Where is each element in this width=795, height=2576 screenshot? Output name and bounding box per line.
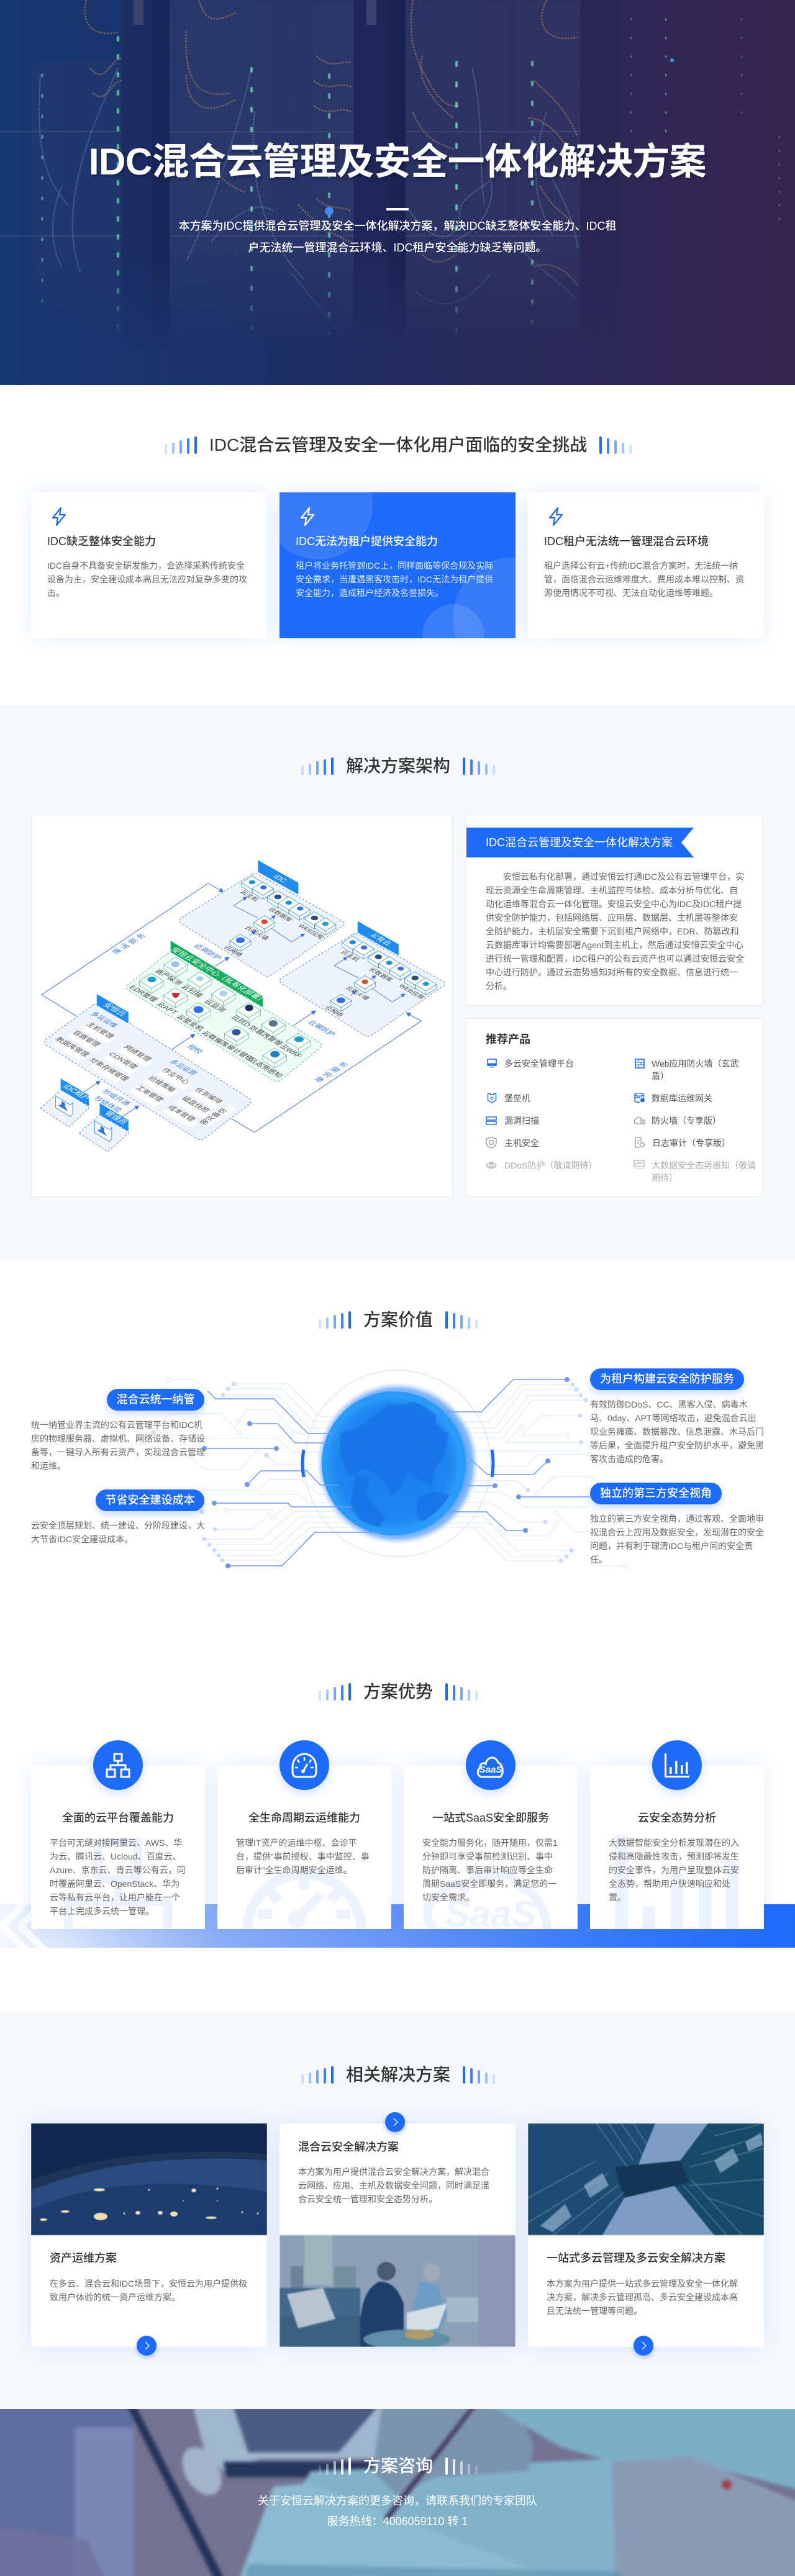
product: web application firewall	[635, 1059, 739, 1081]
value item 1 pill: 混合云统一纳管	[117, 1393, 195, 1406]
security center zone: 资产探测	[153, 968, 184, 987]
connector labels: 操运服务	[110, 931, 150, 955]
security center zone: 防篡改管理	[247, 1024, 285, 1047]
card text	[547, 2277, 738, 2318]
card heading: 全面的云平台覆盖能力	[62, 1812, 174, 1824]
Anheng cloud zone: 网络管理	[122, 1044, 153, 1062]
related card 1	[31, 2123, 267, 2347]
value item 3 pill	[590, 1368, 744, 1390]
card text: 源使用情况不可视、无法自动化运维等难题。	[544, 587, 718, 597]
card text: 台，提供“事前授权、事中监控、事	[236, 1851, 370, 1861]
card text	[47, 560, 247, 597]
challenge card 3	[528, 492, 764, 638]
card heading: 云安全态势分析	[638, 1812, 716, 1824]
ribbon heading	[466, 828, 694, 857]
icon: lightning bolt	[549, 507, 563, 526]
summary text: 云数据库审计均需要部署Agent到主机上，然后通过安恒云安全中心	[486, 940, 743, 950]
arrow button 1	[137, 2336, 157, 2356]
section heading: related solutions	[301, 2066, 494, 2084]
globe	[317, 1383, 478, 1544]
value item 2 text: 大节省IDC安全建设成本。	[31, 1534, 133, 1544]
summary text: 动化运维等混合云一体化管理。安恒云安全中心为IDC及IDC租户提	[486, 899, 742, 909]
card heading: IDC无法为租户提供安全能力	[296, 535, 438, 548]
product: firewall dedicated: 防火墙（专享版）	[652, 1116, 721, 1126]
card text: 周期SaaS安全即服务，满足您的一	[422, 1879, 556, 1889]
IDC zone	[179, 860, 344, 976]
icon: bar chart	[652, 1740, 702, 1790]
summary text: 中心进行防护。通过云态势感知对所有的安全数据、信息进行统一	[486, 967, 738, 977]
card text: 租户选择公有云+传统IDC混合方案时，无法统一纳	[544, 560, 738, 570]
image: earth at night	[31, 2123, 267, 2235]
public cloud zone: 云数据库	[366, 966, 395, 983]
card text	[544, 560, 744, 597]
hero description	[179, 220, 616, 253]
image: business meeting	[279, 2235, 516, 2347]
summary text: 进行统一管理和配置，IDC租户的公有云资产也可以通过安恒云安全	[486, 954, 744, 964]
card text: 大数据智能安全分析发现潜在的入	[609, 1838, 739, 1848]
summary text	[486, 872, 744, 991]
summary text: 全防护能力，主机层安全需要下沉到租户网络中，EDR、防篡改和	[486, 926, 739, 936]
advantage card 2	[217, 1765, 391, 1929]
card text: 平台上完成多云统一管理。	[50, 1906, 154, 1916]
Anheng cloud zone: 数据库管理	[53, 1036, 91, 1058]
card text: 致用户体验的统一资产运维方案。	[50, 2292, 180, 2302]
value item 4 pill: 独立的第三方安全视角	[600, 1487, 712, 1499]
icon: lightning bolt	[52, 507, 66, 526]
value item 4 text: 任。	[590, 1555, 607, 1565]
hero description: 户无法统一管理混合云环境、IDC租户安全能力缺乏等问题。	[248, 241, 547, 253]
IDC zone: IDC	[271, 874, 288, 884]
advantages gradient band	[0, 1904, 795, 1948]
IDC zone: 云主机	[238, 889, 261, 903]
thin light lines	[153, 1377, 627, 1568]
Anheng cloud zone: CDN管理	[107, 1051, 140, 1070]
card text: 切安全需求。	[422, 1892, 475, 1902]
card text: 置。	[609, 1892, 626, 1902]
image: skyscrapers	[528, 2123, 764, 2235]
security center zone: EDR管理	[127, 984, 160, 1003]
ribbon heading: IDC混合云管理及安全一体化解决方案	[486, 836, 673, 849]
security center zone: 云态势感知	[247, 1057, 285, 1079]
security center zone: 云WAF	[278, 1044, 303, 1059]
value item 3 text: 现业务瘫痪、数据篡改、信息泄露、木马后门	[590, 1427, 764, 1437]
card heading: IDC缺乏整体安全能力	[47, 535, 156, 548]
security center zone: 云抗D	[229, 1014, 253, 1028]
value item 4 text: 独立的第三方安全视角，通过客观、全面地审	[590, 1514, 764, 1524]
related card 2	[279, 2123, 516, 2347]
panel: recommended products	[466, 1018, 763, 1197]
advantage card 1	[31, 1765, 205, 1929]
public cloud zone: 云防火墙	[343, 985, 371, 1001]
card text: 后审计”全生命周期安全运维。	[236, 1865, 352, 1875]
value item 1 text: 备等，一键导入所有云资产，实现混合云管理	[31, 1447, 205, 1457]
card heading: 全生命周期云运维能力	[248, 1812, 360, 1824]
card text	[422, 1836, 558, 1904]
value item 2 text: 云安全顶层规划、统一建设、分阶段建设，大	[31, 1521, 205, 1530]
card text: 的安全事件，为用户呈现整体云安	[609, 1865, 739, 1875]
panel: isometric architecture diagram	[31, 815, 453, 1197]
security center zone: 云监测	[202, 998, 227, 1013]
card text: 时覆盖阿里云、OpenStack、华为	[50, 1879, 179, 1889]
card heading: IDC租户无法统一管理混合云环境	[544, 535, 709, 548]
products heading: 推荐产品	[486, 1033, 530, 1046]
product: host security	[486, 1137, 539, 1149]
section heading: consultation	[319, 2457, 476, 2475]
product: multi-cloud platform: 多云安全管理平台	[504, 1059, 574, 1069]
value item 3 text: 有效防御DDoS、CC、黑客入侵、病毒木	[590, 1399, 748, 1409]
card text: 为云、腾讯云、Ucloud、百度云、	[50, 1851, 181, 1861]
Anheng cloud zone: 安恒云	[101, 1001, 129, 1018]
connector labels: 秒级体验	[93, 1095, 124, 1114]
IDC zone: 云防火墙	[243, 924, 271, 941]
product: host security: 主机安全	[504, 1138, 539, 1148]
consultation text: 关于安恒云解决方案的更多咨询，请联系我们的专家团队	[258, 2495, 537, 2507]
product: DDoS protection: DDoS防护（敬请期待）	[504, 1160, 597, 1170]
section heading: architecture	[301, 756, 495, 775]
card text: 云网络、应用、主机及数据安全问题，同时满足混	[298, 2181, 489, 2190]
card text: 安全需求，当遭遇黑客攻击时，IDC无法为租户提供	[296, 574, 493, 584]
card text: 且无法统一管理等问题。	[547, 2306, 642, 2316]
light dots	[152, 1382, 588, 1563]
public cloud zone: 云主机	[338, 949, 361, 962]
Anheng cloud zone: 多云运维	[88, 1010, 120, 1029]
panel: related solutions section background	[0, 2012, 795, 2409]
Anheng cloud zone: 对象存储管理	[87, 1057, 131, 1082]
Anheng cloud zone: 工单管理	[134, 1084, 165, 1103]
hero title: IDC混合云管理及安全一体化解决方案	[89, 141, 706, 183]
decorative circles	[279, 492, 516, 638]
product: big data situational awareness	[634, 1160, 756, 1183]
card text: 决方案，解决多云管理孤岛、多云安全建设成本高	[547, 2292, 738, 2302]
circuit main lines	[204, 1380, 590, 1566]
Anheng cloud zone: 容器管理	[71, 1029, 102, 1048]
security center zone	[127, 941, 322, 1082]
summary text: 安恒云私有化部署，通过安恒云打通IDC及公有云管理平台，实	[503, 872, 744, 882]
security center zone: 云数据库审计管理	[199, 1029, 256, 1062]
card text	[236, 1838, 370, 1875]
architecture diagram	[40, 861, 445, 1152]
Anheng cloud zone: 任务编排	[193, 1087, 225, 1105]
card text: 侵和高隐蔽性攻击，预测即将发生	[609, 1851, 739, 1861]
IDC zone: 云数据库	[266, 906, 294, 923]
value item 2 pill: 节省安全建设成本	[106, 1494, 195, 1506]
card text: 安全能力，造成租户经济及名誉损失。	[296, 587, 443, 597]
value item 3 text: 客攻击造成的危害。	[590, 1454, 668, 1464]
administrator	[79, 1103, 130, 1152]
Anheng cloud zone: 容灾备份	[198, 1106, 229, 1126]
product: database gateway: 数据库运维网关	[652, 1093, 712, 1103]
card text: 全态势，帮助用户快速响应和处	[609, 1879, 730, 1889]
connector labels: 授权	[185, 1043, 205, 1055]
connector labels: 秒级开通	[101, 1088, 132, 1107]
challenge card 1	[31, 492, 267, 638]
public cloud zone: 公有云	[368, 931, 394, 947]
security center zone: 云堡垒机	[175, 1013, 207, 1033]
security center zone: 云扫描	[179, 983, 205, 998]
card heading: 一站式多云管理及多云安全解决方案	[547, 2252, 725, 2264]
connector labels: 操运服务	[313, 1059, 352, 1083]
card text: 安全能力服务化，随开随用，仅需1	[422, 1838, 558, 1848]
value item 1 text	[31, 1420, 205, 1471]
product: bastion host: 堡垒机	[504, 1093, 530, 1103]
card text: 防护隔离、事后审计响应等全生命	[422, 1865, 553, 1875]
value item 1 text: 房的物理服务器、虚拟机、网络设备、存储设	[31, 1434, 205, 1444]
product: vulnerability scan: 漏洞扫描	[504, 1116, 539, 1126]
card heading: 资产运维方案	[50, 2252, 117, 2264]
section heading: advantages: 方案优势	[363, 1682, 433, 1701]
icon: gauge	[279, 1740, 329, 1790]
value item 3 text: 马、0day、APT等网络攻击，避免混合云出	[590, 1413, 756, 1423]
card text: 云等私有云平台，让用户能在一个	[50, 1892, 180, 1902]
footer consultation banner	[0, 2409, 795, 2576]
product: big data situational awareness: 期待）	[652, 1173, 678, 1183]
chart: globe with circuit lines	[152, 1370, 628, 1568]
Anheng cloud zone: 运维策略	[146, 1075, 178, 1093]
product: web application firewall: 盾）	[652, 1071, 669, 1081]
outer ring	[304, 1370, 491, 1557]
Anheng cloud zone: 主机管理	[84, 1021, 116, 1039]
card text: 本方案为用户提供混合云安全解决方案，解决混合	[298, 2167, 489, 2177]
hotline: 服务热线：4006059110 转 1	[327, 2515, 468, 2528]
card text	[50, 2277, 247, 2304]
value item 4 text	[590, 1514, 764, 1565]
card text: 管，面临混合云运维难度大、费用成本难以控制、资	[544, 574, 744, 584]
card text: 设备为主，安全建设成本高且无法应对复杂多变的攻	[47, 574, 247, 584]
section heading: solution value: 方案价值	[363, 1310, 433, 1329]
administrator: 管理员	[102, 1109, 130, 1126]
circuit dots	[202, 1377, 570, 1568]
value item 2 text	[31, 1521, 205, 1544]
value item 1 text: 和运维。	[31, 1461, 66, 1471]
icon: SaaS cloud	[466, 1740, 516, 1790]
card text: 分钟即可享受事前检测识别、事中	[422, 1851, 553, 1861]
card text	[609, 1836, 739, 1904]
card text: 在多云、混合云和IDC场景下，安恒云为用户提供极	[50, 2279, 247, 2289]
card text: Azure、京东云、青云等公有云，同	[50, 1865, 186, 1875]
Anheng cloud zone: 作业中心	[160, 1067, 191, 1085]
watermark: gauge	[242, 1869, 366, 1929]
arrow button 3	[634, 2336, 653, 2356]
icon: SaaS cloud: SaaS	[479, 1765, 502, 1775]
hero divider	[386, 208, 409, 210]
value item 1 pill	[107, 1389, 204, 1411]
hero background: server racks and cables	[0, 0, 780, 337]
watermark: SaaS cloud	[404, 1765, 578, 1929]
summary text: 现云资源全生命周期管理、主机监控与体检、成本分析与优化、自	[486, 885, 738, 895]
card text	[298, 2165, 489, 2206]
card heading: 一站式SaaS安全即服务	[432, 1812, 549, 1824]
connector labels: 近源防护	[192, 942, 224, 961]
value item 4 text: 视混合云上应用及数据安全，发现潜在的安全	[590, 1527, 764, 1537]
product: big data situational awareness: 大数据安全态势感知（敬请	[652, 1160, 756, 1170]
value item 4 text: 问题，并有利于理清IDC与租户间的安全责	[590, 1541, 753, 1551]
footer background photo	[0, 2405, 795, 2576]
panel: solution summary	[466, 815, 763, 1006]
Anheng cloud zone: 成本管理	[166, 1104, 198, 1123]
card text	[50, 1838, 186, 1916]
section heading: solution value	[319, 1310, 478, 1329]
public cloud zone	[279, 921, 445, 1036]
product: bastion host	[487, 1093, 530, 1103]
connector labels: 云端防护	[306, 1019, 337, 1037]
watermark: org chart	[64, 1838, 172, 1929]
value item 4 pill	[590, 1483, 722, 1504]
IDC tenant: IDC租户	[61, 1083, 93, 1102]
card text: 管理IT资产的运维中枢、会诊平	[236, 1838, 357, 1848]
section heading: security challenges: IDC混合云管理及安全一体化用户面临的安全挑战	[209, 435, 587, 454]
arcs	[302, 1450, 304, 1477]
watermark: bar chart	[590, 1765, 764, 1929]
public cloud zone: WEB应用	[397, 983, 427, 1000]
section heading: consultation: 方案咨询	[363, 2456, 433, 2475]
summary text: 供安全防护能力，包括网络层、应用层、数据层、主机层等整体安	[486, 913, 738, 923]
summary text: 分析。	[486, 981, 512, 991]
card text: 合云安全统一管理和安全态势分析。	[298, 2194, 437, 2204]
panel: architecture section background	[0, 706, 795, 1259]
card text: 租户将业务托管到IDC上，同样面临等保合规及实际	[296, 560, 493, 570]
connector lines	[42, 884, 421, 1132]
advantage card 4	[590, 1765, 764, 1929]
hero description: 本方案为IDC提供混合云管理及安全一体化解决方案，解决IDC缺乏整体安全能力、IDC租	[179, 220, 616, 232]
section heading: related solutions: 相关解决方案	[346, 2065, 450, 2084]
connector labels	[93, 931, 352, 1114]
challenge card 2 (highlighted)	[279, 492, 516, 638]
value item 3 text: 等后果，全面提升租户安全防护水平，避免黑	[590, 1440, 764, 1450]
product: vulnerability scan	[486, 1116, 539, 1126]
advantage card 3	[404, 1765, 578, 1929]
related card 3	[528, 2123, 764, 2347]
security center zone: 云APT	[155, 1001, 179, 1016]
Anheng cloud zone: 多云运营	[167, 1058, 199, 1077]
IDC zone: WEB应用	[296, 923, 326, 940]
chevron pattern	[0, 1904, 47, 1948]
security center zone: 安恒云安全中心（私有化部署）	[169, 946, 270, 1004]
card text: IDC自身不具备安全研发能力，会选择采购传统安全	[47, 560, 245, 570]
card heading: 混合云安全解决方案	[298, 2141, 399, 2153]
Anheng cloud zone	[45, 994, 251, 1140]
icon: lightning bolt	[301, 507, 314, 526]
hero banner	[0, 0, 795, 385]
card text: 击。	[47, 587, 65, 597]
value item 3 pill: 为租户构建云安全防护服务	[600, 1373, 734, 1385]
IDC tenant	[40, 1078, 93, 1127]
product: log audit: 日志审计（专享版）	[652, 1138, 730, 1148]
card text	[296, 560, 493, 597]
value item 3 text	[590, 1399, 764, 1464]
icon: network hierarchy	[93, 1740, 143, 1790]
card text: 本方案为用户提供一站式多云管理及安全一体化解	[547, 2279, 738, 2289]
product: web application firewall: Web应用防火墙（玄武	[652, 1059, 739, 1069]
card text: 平台可无缝对接阿里云、AWS、华	[50, 1838, 182, 1848]
public cloud zone: 云网络	[322, 1005, 345, 1018]
value item 2 pill	[96, 1489, 204, 1511]
Anheng cloud zone: 磁盘快照	[179, 1095, 211, 1114]
arrow button 2	[385, 2112, 405, 2132]
value item 1 text: 统一纳管业界主流的公有云管理平台和IDC机	[31, 1420, 202, 1430]
IDC zone: 云网络	[222, 944, 245, 958]
section heading: architecture: 解决方案架构	[346, 756, 450, 775]
section heading: advantages	[319, 1682, 478, 1701]
